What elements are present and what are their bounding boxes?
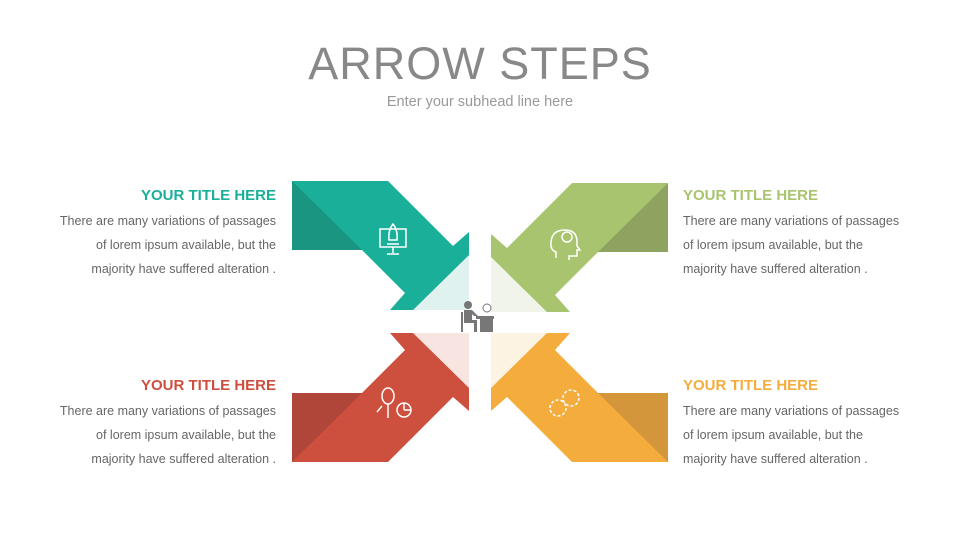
text block: top-left	[60, 187, 276, 276]
text block: bottom-right	[683, 377, 899, 466]
arrow: orange	[491, 333, 668, 462]
text block: top-right: There are many variations of passages	[683, 214, 899, 228]
text block: top-right: of lorem ipsum available, but the	[683, 238, 863, 252]
title: ARROW STEPS	[308, 38, 652, 89]
text block: top-right: majority have suffered alteration .	[683, 262, 868, 276]
arrow: red	[292, 333, 469, 462]
text block: bottom-left	[60, 377, 276, 466]
subhead: Enter your subhead line here	[387, 94, 573, 110]
text block: bottom-left: YOUR TITLE HERE	[141, 377, 276, 394]
text block: bottom-right: of lorem ipsum available, but the	[683, 428, 863, 442]
text block: top-right: YOUR TITLE HERE	[683, 187, 818, 204]
text block: bottom-left: of lorem ipsum available, but the	[96, 428, 276, 442]
icon: head gear	[551, 230, 580, 260]
text block: top-left: There are many variations of passages	[60, 214, 276, 228]
icon: gears	[550, 390, 579, 416]
text block: bottom-right: There are many variations of passages	[683, 404, 899, 418]
text block: top-left: majority have suffered alteration .	[91, 262, 276, 276]
text block: top-left: of lorem ipsum available, but the	[96, 238, 276, 252]
icon: center person at desk	[461, 301, 494, 332]
text block: bottom-right: YOUR TITLE HERE	[683, 377, 818, 394]
arrow: green	[491, 183, 668, 312]
arrow: teal	[292, 181, 469, 310]
icon: rocket monitor	[380, 224, 406, 254]
icon: person chart	[377, 388, 411, 418]
text block: bottom-right: majority have suffered alteration .	[683, 452, 868, 466]
text block: top-left: YOUR TITLE HERE	[141, 187, 276, 204]
text block: bottom-left: majority have suffered alteration .	[91, 452, 276, 466]
text block: bottom-left: There are many variations of passages	[60, 404, 276, 418]
text block: top-right	[683, 187, 899, 276]
